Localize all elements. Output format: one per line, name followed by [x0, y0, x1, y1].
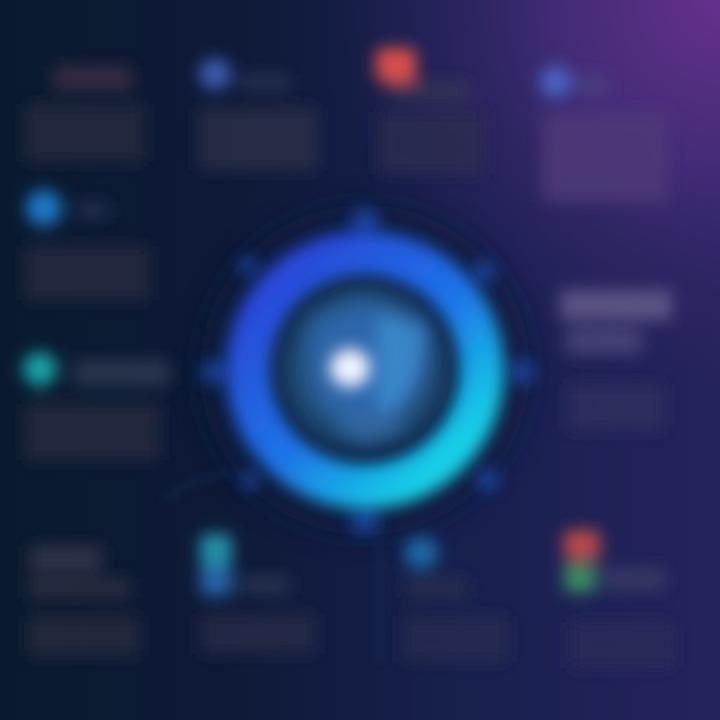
central dark halo — [200, 205, 530, 535]
central shield core — [279, 282, 451, 454]
panel: top row 3 — [376, 48, 486, 174]
panel: top row 1 — [25, 66, 145, 162]
central gear ring — [202, 208, 534, 534]
panel: bottom row 3 — [402, 535, 508, 662]
panel: middle left 2 — [23, 352, 170, 460]
ring teeth — [202, 208, 534, 534]
shield highlight — [378, 312, 424, 420]
panel: bottom row 2 — [200, 534, 316, 654]
white spark — [330, 349, 370, 387]
panel: bottom row 4 — [564, 530, 674, 668]
panel: middle left 1 — [25, 190, 150, 300]
ring band — [249, 254, 481, 486]
shield shape — [310, 300, 424, 440]
lower shadow — [338, 413, 406, 437]
panel: middle right — [560, 290, 672, 430]
panel: top row 2 — [198, 58, 318, 170]
connector lines — [165, 472, 380, 660]
panel: top row 4 — [540, 66, 668, 202]
panel: bottom row 1 — [28, 546, 140, 656]
